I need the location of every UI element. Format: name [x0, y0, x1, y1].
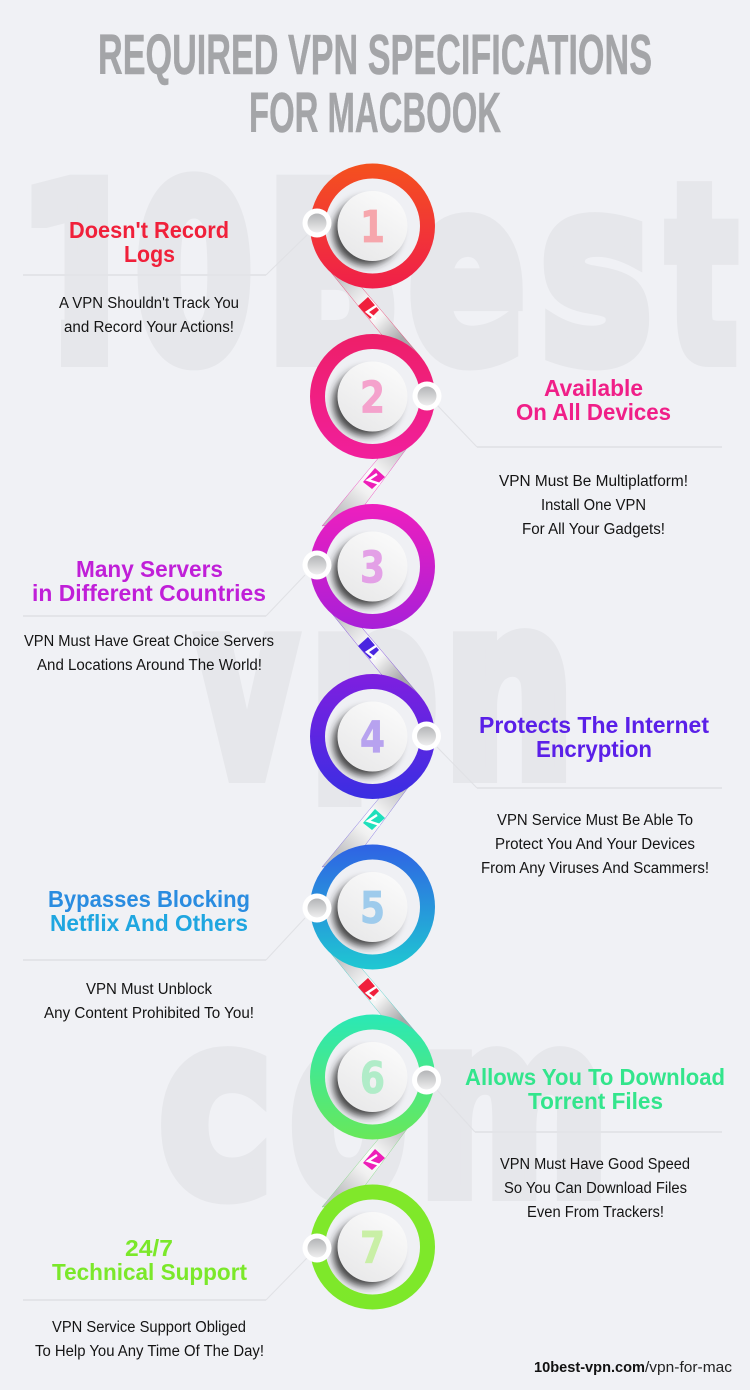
title	[98, 23, 652, 145]
step 1: Doesn't Record Logs: A VPN Shouldn't Track You	[59, 295, 239, 312]
footer url: /vpn-for-mac	[645, 1359, 733, 1376]
step 7: 24/7 Technical Support	[23, 1184, 435, 1360]
watermark: 10Best vpn com: c	[159, 964, 273, 1252]
connector ribbons between rings	[322, 270, 420, 1207]
step 6: Allows You To Download Torrent Files: VPN Must Have Good Speed	[500, 1156, 690, 1173]
step 1: Doesn't Record Logs: Logs	[124, 241, 175, 267]
title: FOR MACBOOK	[249, 81, 501, 145]
step 1: Doesn't Record Logs: Doesn't Record	[69, 217, 229, 243]
watermark: 10Best vpn com: 1	[16, 135, 151, 417]
step 3: Many Servers in Different Countries: Many Servers	[76, 556, 223, 582]
footer url	[534, 1359, 733, 1376]
step 3: Many Servers in Different Countries: VPN Must Have Great Choice Servers	[24, 633, 274, 650]
step 5: Bypasses Blocking Netflix And Others: Any Content Prohibited To You!	[44, 1005, 254, 1022]
step 6: Allows You To Download Torrent Files: Allows You To Download	[465, 1064, 725, 1090]
step 6: Allows You To Download Torrent Files: 6	[360, 1053, 385, 1104]
step 4: Protects The Internet Encryption: Protect You And Your Devices	[495, 836, 695, 853]
watermark: 10Best vpn com: v	[197, 546, 297, 834]
watermark: 10Best vpn com: n	[444, 546, 574, 834]
step 6: Allows You To Download Torrent Files: So You Can Download Files	[504, 1180, 687, 1197]
watermark: 10Best vpn com: 0	[135, 135, 253, 417]
step 2: Available On All Devices	[310, 334, 722, 538]
watermark: 10Best vpn com: s	[540, 130, 652, 418]
step 7: 24/7 Technical Support: VPN Service Support Obliged	[52, 1319, 246, 1336]
step 4: Protects The Internet Encryption: From Any Viruses And Scammers!	[481, 860, 709, 877]
step 1: Doesn't Record Logs: and Record Your Actions!	[64, 319, 234, 336]
step 2: Available On All Devices: Available	[544, 375, 643, 401]
step 3: Many Servers in Different Countries	[23, 504, 435, 674]
step 4: Protects The Internet Encryption	[310, 674, 722, 877]
step 1: Doesn't Record Logs	[23, 164, 435, 336]
step 2: Available On All Devices: On All Devices	[516, 399, 671, 425]
step 3: Many Servers in Different Countries: 3	[360, 542, 385, 594]
step 6: Allows You To Download Torrent Files: Torrent Files	[528, 1088, 663, 1114]
step 5: Bypasses Blocking Netflix And Others: Bypasses Blocking	[48, 886, 250, 912]
step 4: Protects The Internet Encryption: Protects The Internet	[479, 712, 709, 738]
step 5: Bypasses Blocking Netflix And Others: VPN Must Unblock	[86, 981, 212, 998]
watermark: 10Best vpn com: m	[418, 964, 610, 1252]
watermark: 10Best vpn com: p	[309, 546, 438, 834]
step 2: Available On All Devices: VPN Must Be Multiplatform!	[499, 473, 688, 490]
step 7: 24/7 Technical Support: Technical Support	[52, 1259, 247, 1285]
step 6: Allows You To Download Torrent Files	[310, 1014, 725, 1221]
step 7: 24/7 Technical Support: 24/7	[125, 1235, 173, 1261]
step 5: Bypasses Blocking Netflix And Others	[23, 844, 435, 1022]
step 3: Many Servers in Different Countries: in Different Countries	[32, 580, 266, 606]
step 2: Available On All Devices: Install One VPN	[541, 497, 646, 514]
step 7: 24/7 Technical Support: 7	[360, 1223, 385, 1274]
watermark: 10Best vpn com: e	[408, 130, 526, 418]
footer url: 10best-vpn.com	[534, 1359, 645, 1376]
watermark: 10Best vpn com: B	[266, 135, 401, 417]
step 6: Allows You To Download Torrent Files: Even From Trackers!	[527, 1204, 664, 1221]
watermark: 10Best vpn com: o	[290, 964, 407, 1252]
step 2: Available On All Devices: 2	[360, 372, 385, 424]
step 5: Bypasses Blocking Netflix And Others: Netflix And Others	[50, 910, 248, 936]
step 3: Many Servers in Different Countries: And Locations Around The World!	[37, 657, 262, 674]
step 7: 24/7 Technical Support: To Help You Any Time Of The Day!	[35, 1343, 264, 1360]
step 4: Protects The Internet Encryption: 4	[360, 712, 385, 764]
step 4: Protects The Internet Encryption: Encryption	[536, 736, 652, 762]
step 1: Doesn't Record Logs: 1	[360, 202, 385, 253]
step 2: Available On All Devices: For All Your Gadgets!	[522, 521, 665, 538]
step 5: Bypasses Blocking Netflix And Others: 5	[360, 883, 385, 934]
watermark: 10Best vpn com	[16, 130, 737, 1252]
step 4: Protects The Internet Encryption: VPN Service Must Be Able To	[497, 812, 693, 829]
